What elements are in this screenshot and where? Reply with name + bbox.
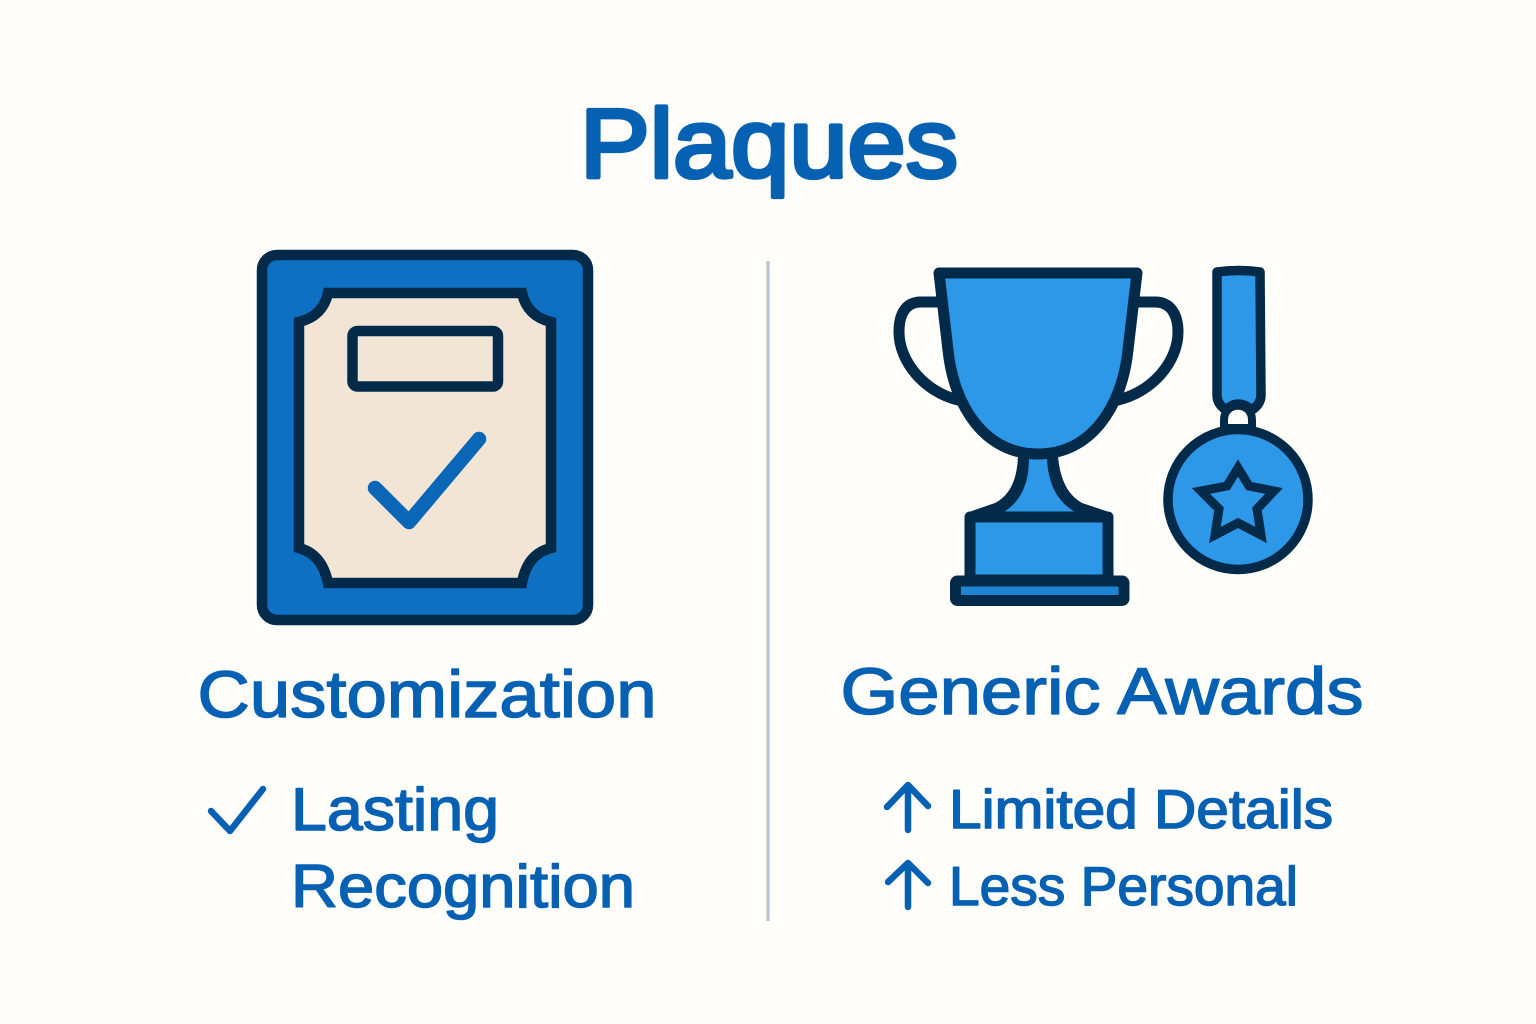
text: less personal: Less Personal (949, 855, 1298, 917)
panel: generic awards (840, 270, 1364, 917)
text: lasting recognition: Recognition (291, 853, 635, 920)
title: Plaques (580, 89, 958, 198)
icon: check mark (211, 789, 263, 831)
heading: customization: Customization (198, 657, 656, 731)
center divider (766, 261, 770, 921)
icon: arrow up (887, 785, 928, 830)
icon: plaque (262, 255, 588, 620)
text: lasting recognition: Lasting (291, 776, 499, 843)
text: limited details: Limited Details (949, 778, 1333, 840)
icon: trophy (899, 273, 1178, 600)
icon: arrow up (888, 863, 928, 907)
icon: medal (1168, 270, 1308, 570)
panel: customization plaque (198, 255, 656, 920)
heading: generic awards: Generic Awards (840, 654, 1364, 728)
